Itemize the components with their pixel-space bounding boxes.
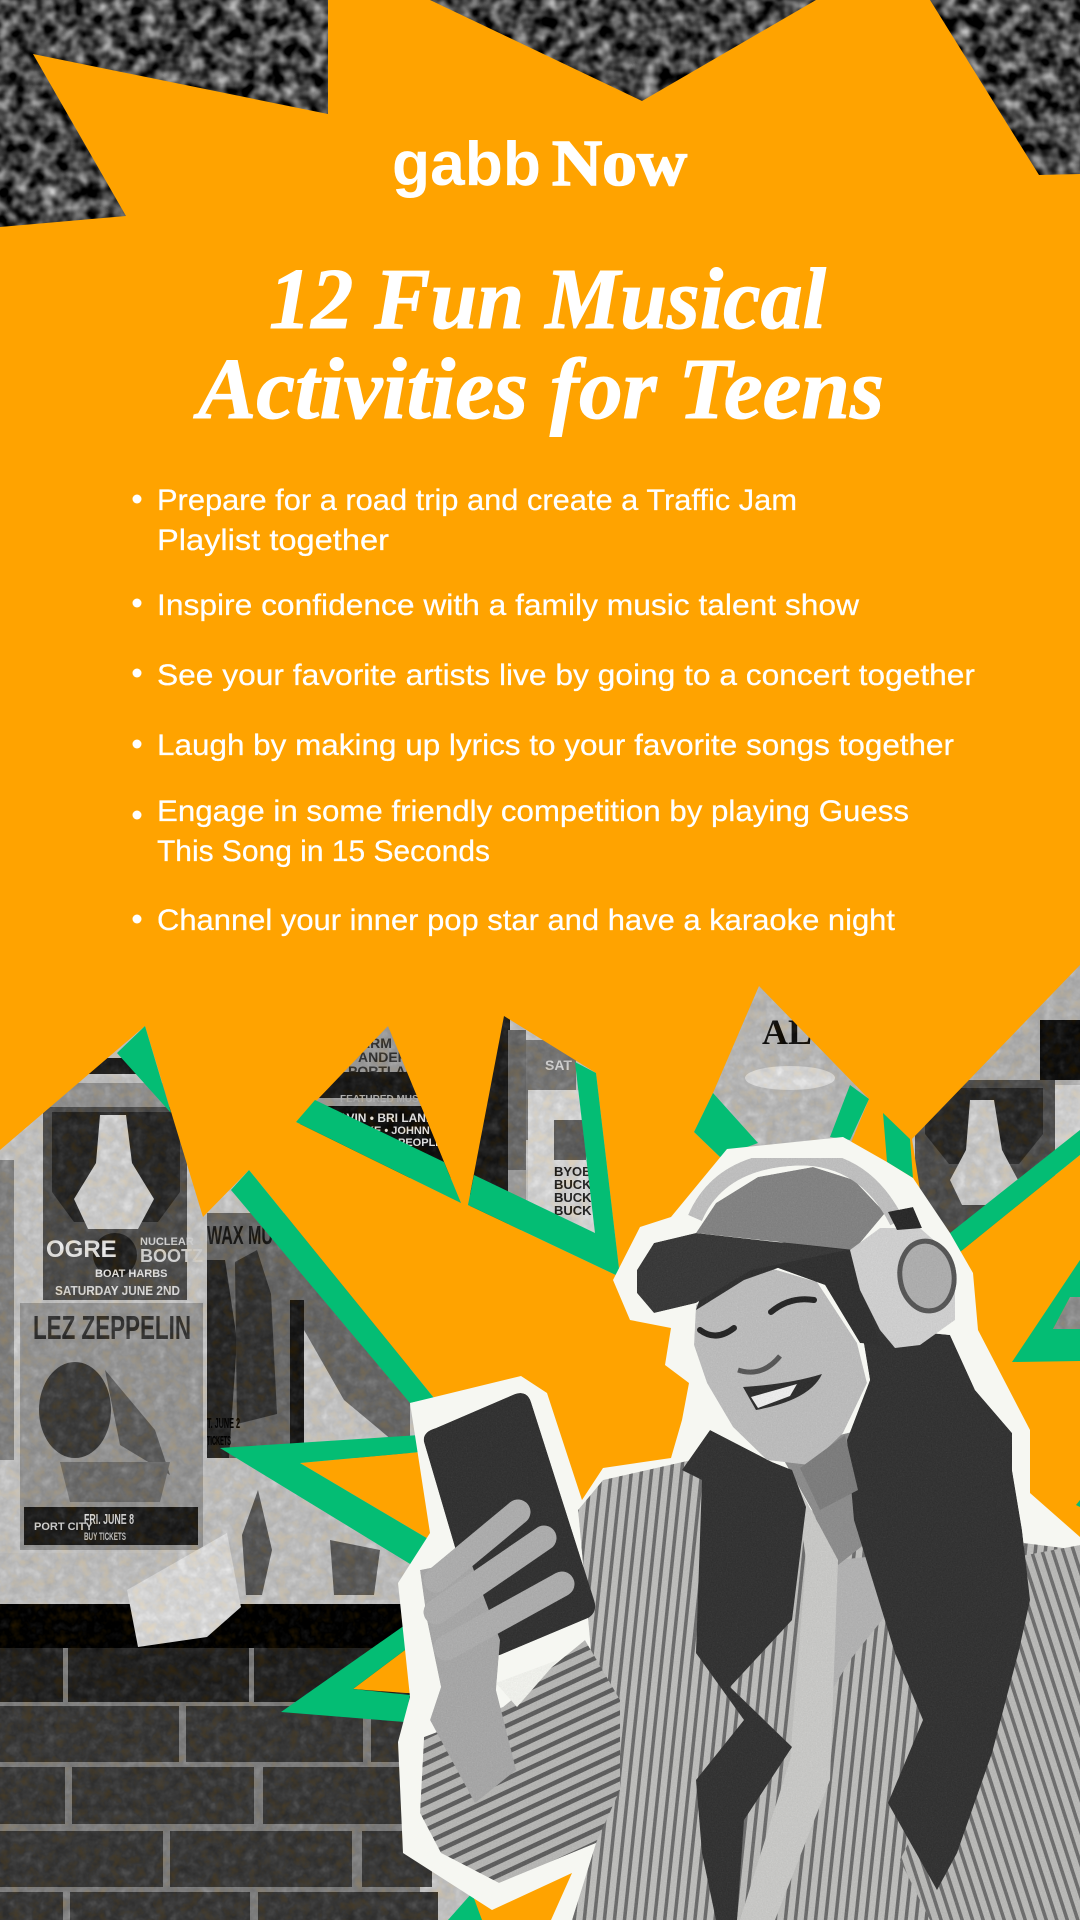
title [193,250,884,437]
poster: Ogre: BOAT HARBS [95,1268,168,1280]
poster: Ogre: BOOTZ [140,1246,203,1266]
face [694,1262,867,1465]
shirt [572,1458,1080,1920]
item 3: See your favorite artists live by going to a concert together [157,659,975,692]
poster: torn A [714,986,866,1146]
phone [424,1393,595,1656]
poster: Ogre: SATURDAY JUNE 2ND [55,1283,180,1298]
inner tee [832,1555,890,1690]
nose shadow [738,1356,780,1372]
poster: Byob Buck: BUCK [554,1190,592,1205]
poster: Anders Portland lineup: ARM [360,1035,392,1051]
poster: torn A: AL [762,1012,812,1052]
smile [743,1374,822,1410]
item 2: Inspire confidence with a family music talent show [157,589,859,622]
gap between arm and shirt [496,1660,558,1707]
poster: Wax Mu: WAX MU [207,1220,273,1250]
logo: gabb Now [392,127,687,200]
poster: Anders Portland lineup: PORTLAND [348,1063,426,1079]
photo cutout: smiling teen with headphones and phone [398,1137,1080,1920]
poster: Anders Portland lineup: DAVIN • BRI LANE [330,1111,434,1125]
poster: Lez Zeppelin: LEZ ZEPPELIN [33,1309,191,1346]
fringe hair [696,1240,880,1345]
poster: Wax Mu: T. JUNE 2 [207,1415,240,1432]
green spike accents [117,1026,1080,1920]
poster: Anders Portland lineup: PEOPLE [398,1137,443,1149]
poster: second Ogre [915,965,1080,1252]
poster: Lez Zeppelin: BUY TICKETS [84,1531,126,1543]
shirt placket [740,1480,838,1920]
poster: Wax Mu: TICKETS [207,1433,231,1448]
item 1: Playlist together [157,524,389,557]
poster: Anders Portland lineup: JAKE • JOHNNY [352,1125,438,1137]
item 1 [132,484,797,557]
logo: gabb Now: gabb [392,130,541,199]
poster: Ogre [43,1058,203,1300]
cap crown [696,1167,885,1250]
hanging paper [127,1533,241,1647]
poster: Byob Buck: BUCK [554,1177,592,1192]
item 5: This Song in 15 Seconds [157,835,490,868]
hand and forearm [420,1512,562,1803]
poster: Byob Buck: BYOB [554,1164,592,1179]
logo: gabb Now: Now [552,127,687,200]
poster: Anders Portland lineup: ANDERS [358,1049,417,1065]
poster: Byob Buck: SAT [545,1057,572,1073]
poster: Anders Portland lineup: FEATURED MUSICAL [340,1094,442,1105]
neck shadow [800,1435,858,1510]
white cutout border [398,1137,1080,1920]
poster: Lez Zeppelin: PORT CITY [34,1521,93,1533]
hair left strand [682,1430,806,1920]
item 1: Prepare for a road trip and create a Traffic Jam [157,484,797,517]
poster: Ogre: NUCLEAR [140,1236,194,1248]
torn paper layer [0,1458,410,1602]
activity list [132,484,975,937]
ear cup [850,1228,955,1348]
item 5 [132,795,909,868]
background: poster wall and bricks photo [0,950,1080,1920]
neck [778,1430,870,1565]
black ledge [0,1604,410,1648]
poster: Byob Buck: BUCK [554,1203,592,1218]
ear cup ring [895,1238,959,1314]
background: gravel wall photo [0,0,1080,300]
poster: Byob Buck [470,1010,598,1240]
title: Activities for Teens [193,340,884,437]
hair back mass [845,1240,1030,1890]
bricks [0,1648,438,1920]
title: 12 Fun Musical [269,250,827,347]
item 4: Laugh by making up lyrics to your favorite songs together [157,729,954,762]
cap brim [637,1233,847,1313]
poster: Lez Zeppelin [20,1303,203,1550]
poster: Anders Portland lineup [300,1020,470,1210]
small poster at right [1053,1297,1080,1329]
eyes and brows [700,1299,814,1336]
item 5: Engage in some friendly competition by playing Guess [157,795,909,828]
item 6: Channel your inner pop star and have a karaoke night [157,904,896,937]
poster: Lez Zeppelin: FRI. JUNE 8 [84,1511,134,1528]
left strip of wall [0,1160,14,1460]
sleeve [420,1640,620,1883]
headband [695,1158,897,1222]
poster: Wax Mu [207,1213,410,1458]
poster: Ogre: OGRE [46,1236,117,1263]
headphone slider [888,1207,922,1230]
shirt right side [900,1545,1080,1920]
